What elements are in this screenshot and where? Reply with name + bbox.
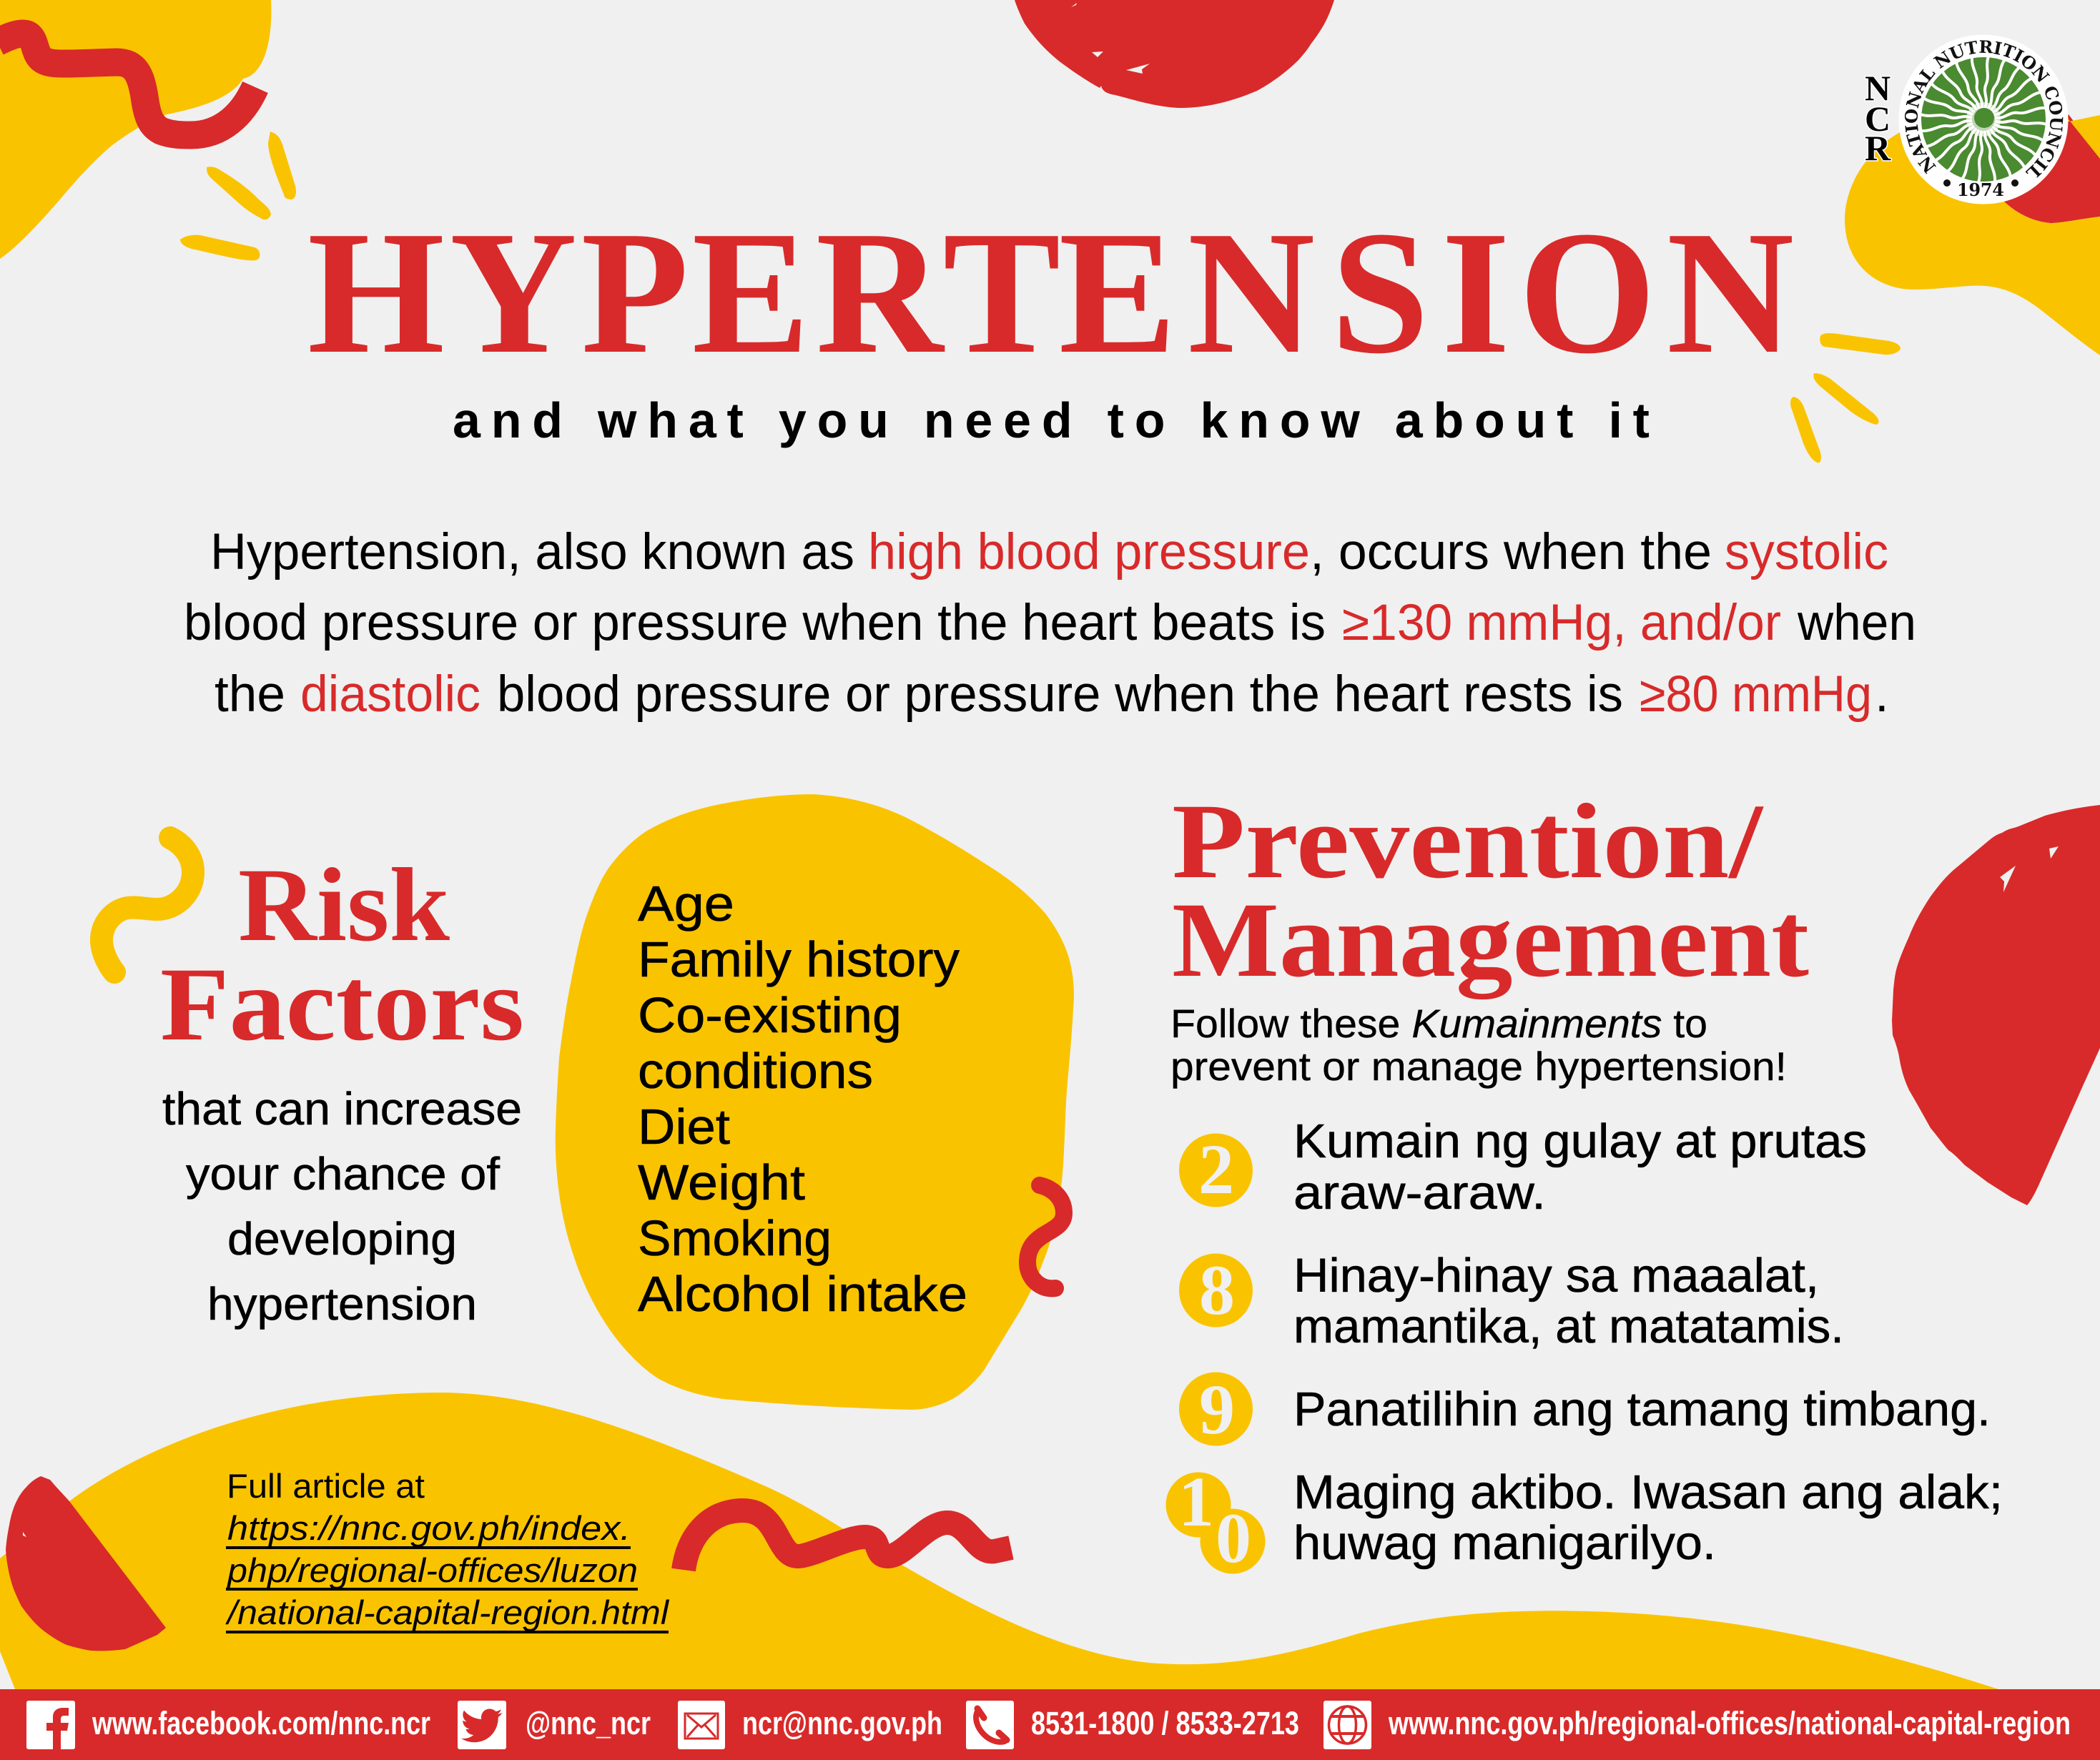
text: kumainment 8: Hinay-hinay sa maaalat, [1293, 1249, 1819, 1302]
text: prevention intro [1170, 1001, 1787, 1089]
icon: phone [966, 1701, 1014, 1749]
badge: 2 [1179, 1129, 1253, 1209]
shape: red blob top-center [1015, 0, 1334, 108]
shape: yellow blob behind risk list [556, 794, 1074, 1410]
logo label: NCR: N [1865, 68, 1891, 108]
shape: yellow blob top-left [0, 0, 271, 259]
list: risk factors: Smoking [638, 1210, 832, 1266]
text: risk factors description: your chance of [186, 1148, 500, 1200]
text: kumainment 8: mamantika, at matatamis. [1293, 1300, 1844, 1353]
squiggle: red on list blob [1027, 1185, 1064, 1288]
intro paragraph: blood pressure or pressure when the heart beats is [184, 595, 1326, 651]
icon: globe [1323, 1701, 1371, 1749]
logo label: NCR: C [1865, 99, 1891, 139]
shape: red blob right [1892, 805, 2100, 1205]
badge: 2: 2 [1198, 1129, 1234, 1209]
text: article link: https://nnc.gov.ph/index. [227, 1509, 631, 1547]
intro paragraph [184, 524, 1916, 723]
intro paragraph: diastolic [300, 666, 480, 723]
text: kumainment 8 [1293, 1249, 1844, 1353]
shape: red blob behind logo [2004, 114, 2100, 223]
logo: National Nutrition Council: NATIONAL NUTRITION COUNCIL [1905, 40, 2064, 178]
heading: Risk Factors: Risk [238, 846, 450, 963]
squiggle: red bottom [684, 1511, 1011, 1570]
list: risk factors: Family history [638, 931, 960, 987]
text: risk factors description: hypertension [207, 1278, 477, 1330]
logo: National Nutrition Council: 1974 [1957, 179, 2004, 200]
footer: phone text: 8531-1800 / 8533-2713 [1031, 1705, 1299, 1741]
heading: Prevention / Management [1172, 782, 1809, 999]
text: kumainment 10: huwag manigarilyo. [1293, 1516, 1716, 1570]
text: kumainment 10: Maging aktibo. Iwasan ang alak; [1293, 1465, 2003, 1519]
intro paragraph: the [215, 666, 285, 723]
text: article link: /national-capital-region.html [225, 1593, 670, 1631]
text: kumainment 2 [1293, 1114, 1867, 1220]
text: article link: Full article at [227, 1467, 425, 1505]
heading: Prevention / Management: Management [1172, 881, 1809, 999]
icon: twitter [458, 1701, 506, 1749]
list: risk factors: Diet [638, 1099, 730, 1155]
heading: Prevention / Management: Prevention/ [1172, 782, 1765, 901]
intro paragraph: Hypertension, also known as [210, 524, 854, 580]
list: risk factors [638, 876, 967, 1322]
intro paragraph: , occurs when the [1310, 524, 1712, 580]
text: kumainment 10 [1293, 1465, 2003, 1570]
shape: yellow wave bottom [0, 1393, 1998, 1689]
sparks: top-left [180, 132, 296, 260]
text: kumainment 2: Kumain ng gulay at prutas [1293, 1114, 1867, 1168]
badge: 10: 1 [1178, 1462, 1214, 1541]
intro paragraph: when [1797, 595, 1916, 651]
heading: Risk Factors: Factors [160, 946, 524, 1062]
heading: Risk Factors [160, 846, 524, 1062]
shape: yellow blob top-right [1845, 115, 2100, 355]
badge: 8: 8 [1199, 1250, 1235, 1330]
icon: facebook [26, 1701, 75, 1749]
list: risk factors: Alcohol intake [638, 1266, 967, 1322]
badge: 10: 0 [1216, 1498, 1251, 1578]
badge: 9: 9 [1199, 1370, 1235, 1449]
text: risk factors description: developing [227, 1213, 457, 1265]
text: risk factors description [162, 1083, 522, 1330]
footer: facebook text: www.facebook.com/nnc.ncr [92, 1705, 430, 1741]
intro paragraph: blood pressure or pressure when the heart rests is [497, 666, 1623, 723]
intro paragraph: ≥130 mmHg, and/or [1342, 595, 1781, 651]
list: risk factors: Co-existing [638, 987, 902, 1043]
footer bar [0, 1689, 2100, 1760]
text: article link [225, 1467, 670, 1632]
list: risk factors: Age [638, 876, 734, 931]
squiggle: red top-left [0, 34, 255, 135]
badge: 9 [1179, 1370, 1253, 1449]
text: risk factors description: that can increase [162, 1083, 522, 1134]
list: risk factors: conditions [638, 1043, 873, 1099]
text: prevention intro: prevent or manage hypertension! [1170, 1044, 1787, 1089]
text: kumainment 2: araw-araw. [1293, 1166, 1546, 1220]
shape: red half circle bottom-left [6, 1476, 166, 1651]
icon: mail [678, 1701, 725, 1749]
intro paragraph: high blood pressure [868, 524, 1310, 580]
intro paragraph: . [1875, 666, 1889, 723]
logo label: NCR: R [1865, 128, 1891, 168]
logo label: NCR [1865, 68, 1891, 168]
intro paragraph: ≥80 mmHg [1640, 666, 1872, 723]
sparks: top-right [1790, 333, 1901, 463]
badge: 10 [1165, 1462, 1266, 1578]
text: kumainment 9: Panatilihin ang tamang timbang. [1293, 1383, 1991, 1436]
badge: 8 [1179, 1250, 1253, 1330]
text: prevention intro: Follow these Kumainments to [1170, 1001, 1707, 1046]
list: risk factors: Weight [638, 1155, 805, 1210]
subtitle: and what you need to know about it [453, 392, 1650, 448]
intro paragraph: systolic [1725, 524, 1888, 580]
title: HYPERTENSION [307, 195, 1794, 390]
squiggle: yellow near Risk Factors [102, 838, 193, 972]
footer: email text: ncr@nnc.gov.ph [742, 1705, 942, 1741]
text: article link: php/regional-offices/luzon [226, 1551, 638, 1589]
footer: twitter text: @nnc_ncr [526, 1705, 651, 1741]
